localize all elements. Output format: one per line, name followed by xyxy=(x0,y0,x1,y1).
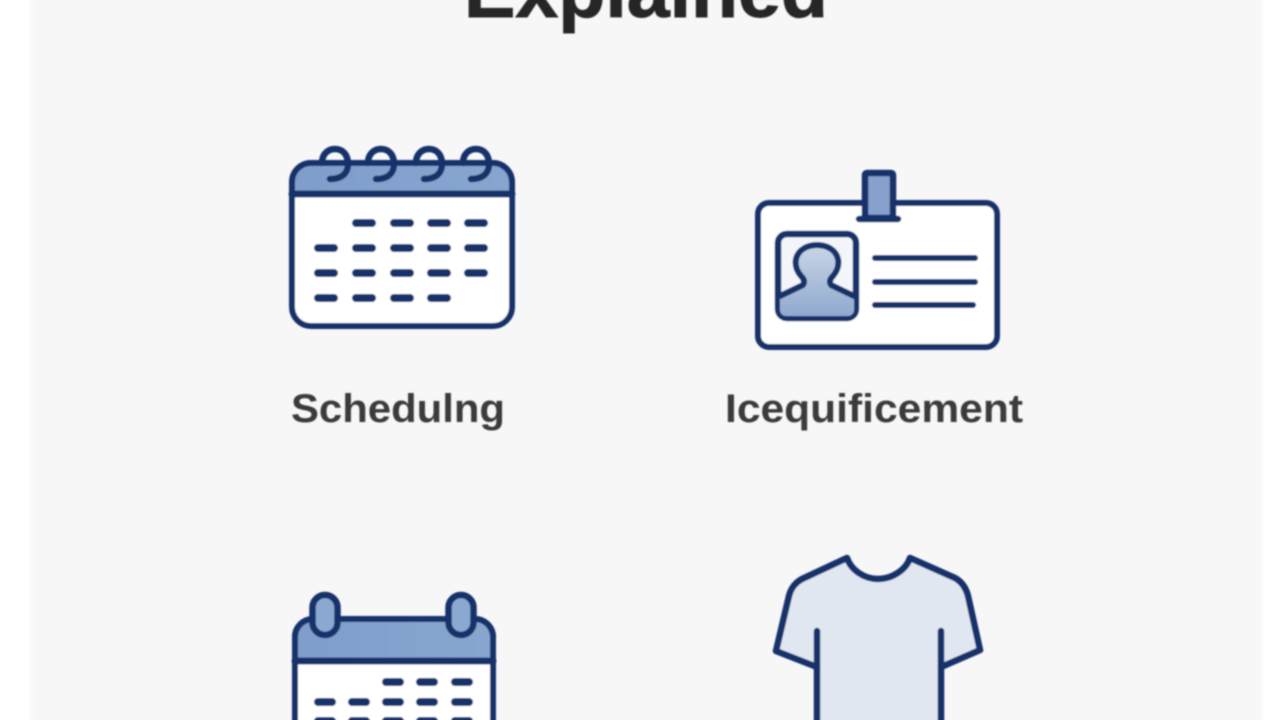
icon: spiral calendar xyxy=(292,149,512,326)
label: Schedulng: Schedulng xyxy=(291,387,505,431)
label: Icequificement: Icequificement xyxy=(725,387,1023,431)
icon: ID badge xyxy=(758,173,997,347)
icon: t-shirt xyxy=(776,558,980,720)
icon: ring calendar xyxy=(295,595,493,720)
